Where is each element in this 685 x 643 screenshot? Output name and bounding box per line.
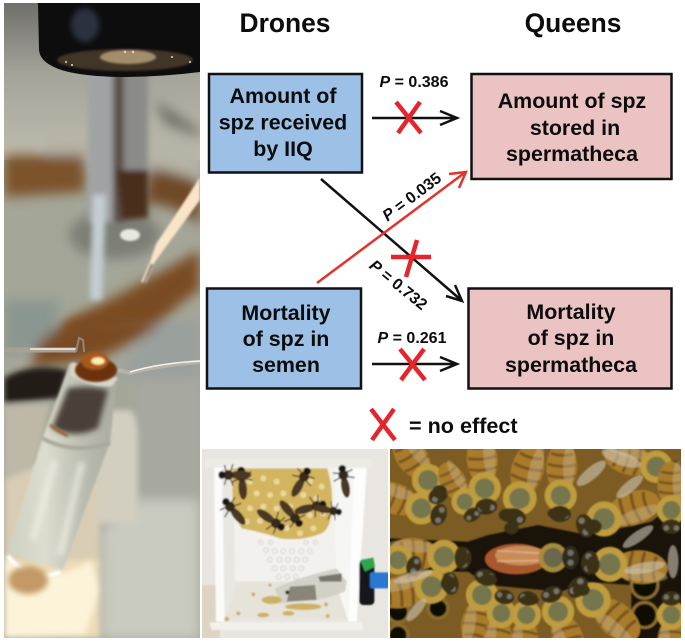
icon: glass capillary <box>141 177 200 283</box>
arrow: received to spermatheca mortality, no effect <box>321 179 462 301</box>
label: P = 0.035: P = 0.035 <box>380 170 445 225</box>
box: mortality of spz in spermatheca: spermatheca <box>505 353 638 377</box>
legend: X means no effect: = no effect <box>409 413 518 438</box>
box: mortality of spz in semen: semen <box>252 353 320 377</box>
icon: objective lens <box>38 3 200 77</box>
photo: queen surrounded by worker bees <box>390 449 681 638</box>
lower background <box>4 300 200 640</box>
box: amount of spz received by IIQ: spz received <box>219 110 347 134</box>
photo: insemination apparatus <box>4 3 200 640</box>
label: P = 0.261: P = 0.261 <box>378 330 447 347</box>
icon: plastic tube holding the queen <box>7 352 118 594</box>
photo: observation cage with bees <box>200 449 389 638</box>
box: mortality of spz in spermatheca <box>468 288 672 388</box>
box: mortality of spz in spermatheca: of spz in <box>528 326 614 350</box>
box: mortality of spz in semen <box>207 288 361 388</box>
box: amount of spz stored in spermatheca <box>472 74 672 179</box>
box: mortality of spz in spermatheca: Mortality <box>526 300 616 324</box>
legend: X means no effect <box>371 409 518 440</box>
head cluster around the queen <box>432 485 602 605</box>
arrow: received to stored, no effect <box>372 102 457 133</box>
box: mortality of spz in semen: of spz in <box>243 327 329 351</box>
label: P = 0.386: P = 0.386 <box>380 74 449 91</box>
box: amount of spz stored in spermatheca: Amount of spz <box>498 89 646 113</box>
box: amount of spz stored in spermatheca: stored in <box>530 116 620 140</box>
arrow: mortality in semen to mortality in spermatheca, no effect <box>372 349 457 380</box>
box: mortality of spz in semen: Mortality <box>241 301 331 325</box>
column heading: Queens: Queens <box>525 8 621 38</box>
column heading: Drones: Drones <box>240 8 330 38</box>
box: amount of spz stored in spermatheca: spermatheca <box>506 142 639 166</box>
box: amount of spz received by IIQ: Amount of <box>230 84 337 108</box>
box: amount of spz received by IIQ <box>209 74 362 172</box>
icon: hook wires <box>4 338 200 373</box>
pillar <box>88 72 148 300</box>
golden ground of overlapping bees <box>388 445 685 542</box>
box: amount of spz received by IIQ: by IIQ <box>253 137 313 161</box>
arrow: semen mortality to amount stored, significant <box>317 172 466 283</box>
label: P = 0.732: P = 0.732 <box>366 257 430 314</box>
